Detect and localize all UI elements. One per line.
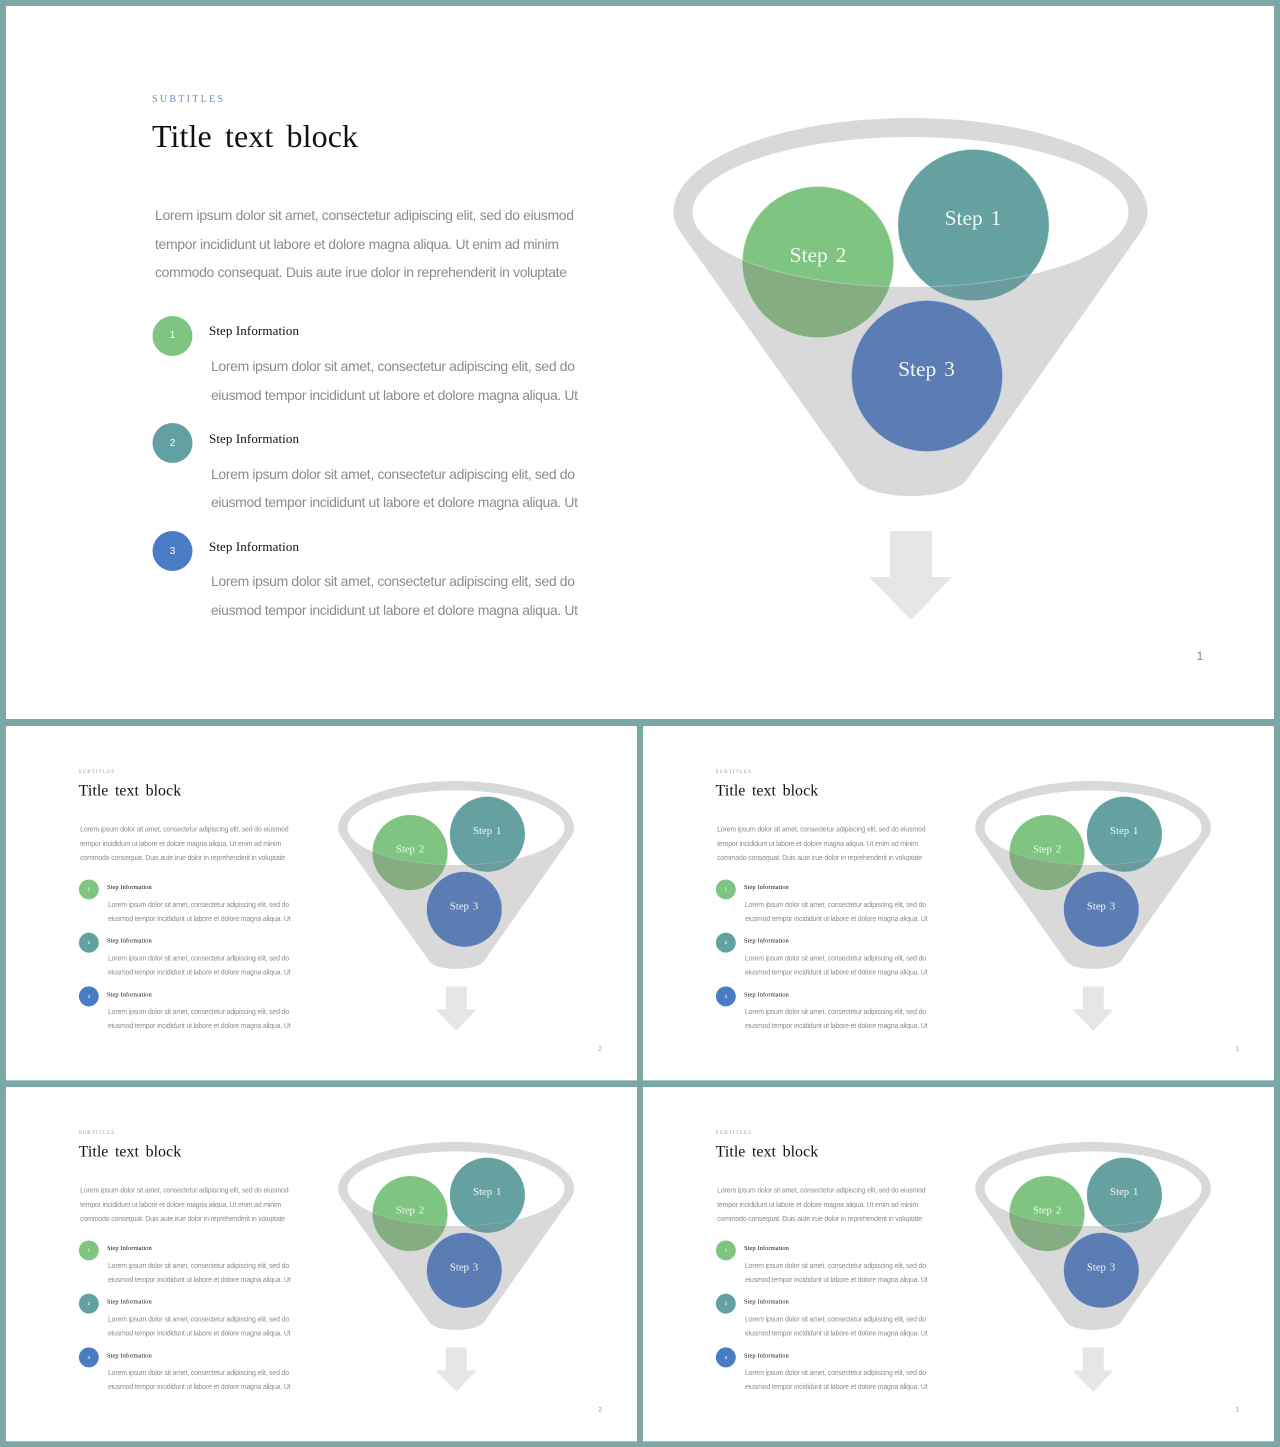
intro text block: commodo consequat. Duis aute irue dolor in reprehenderit in voluptate bbox=[155, 264, 567, 280]
circle: step 3 bbox=[427, 1233, 502, 1308]
title: Title text block bbox=[716, 782, 818, 799]
panel: slide 3 bbox=[643, 726, 1274, 1080]
step item 1: Lorem ipsum dolor sit amet, consectetur adipiscing elit, sed do bbox=[211, 358, 575, 374]
step item 1: Step Information bbox=[209, 323, 300, 338]
intro text block: tempor incididunt ut labore et dolore magna aliqua. Ut enim ad minim bbox=[717, 1202, 918, 1209]
intro text block bbox=[80, 1188, 289, 1223]
circle: step 3: Step 3 bbox=[1087, 1261, 1115, 1273]
intro text block bbox=[717, 827, 926, 862]
step item 3: eiusmod tempor incididunt ut labore et dolore magna aliqua. Ut bbox=[108, 1023, 291, 1030]
step item 2 bbox=[79, 933, 291, 976]
page number: 1 bbox=[1235, 1047, 1239, 1053]
step item 1: eiusmod tempor incididunt ut labore et dolore magna aliqua. Ut bbox=[108, 1277, 291, 1284]
step item 2: Lorem ipsum dolor sit amet, consectetur adipiscing elit, sed do bbox=[108, 956, 289, 963]
step item 3: Step Information bbox=[744, 1352, 790, 1359]
step item 1: Step Information bbox=[744, 1245, 790, 1252]
circle: step 2: Step 2 bbox=[396, 1205, 424, 1217]
circle: step 1 bbox=[1086, 796, 1162, 872]
arrow bbox=[1072, 1347, 1114, 1392]
title: Title text block bbox=[152, 118, 358, 154]
circle: step 1 bbox=[1086, 1157, 1162, 1233]
panel: main slide 1 bbox=[6, 6, 1274, 719]
panel: slide 2 bbox=[6, 726, 637, 1080]
circle: step 3: Step 3 bbox=[450, 900, 478, 912]
circle: step 1 bbox=[898, 149, 1050, 301]
funnel diagram bbox=[338, 1142, 574, 1330]
funnel shape bbox=[674, 118, 1148, 496]
step item 3: 3 bbox=[170, 546, 176, 557]
step item 3: Lorem ipsum dolor sit amet, consectetur adipiscing elit, sed do bbox=[745, 1009, 926, 1016]
circle: step 1 bbox=[450, 796, 526, 872]
intro text block: Lorem ipsum dolor sit amet, consectetur adipiscing elit, sed do eiusmod bbox=[80, 1188, 289, 1195]
step item 3: eiusmod tempor incididunt ut labore et dolore magna aliqua. Ut bbox=[211, 602, 578, 618]
funnel diagram bbox=[674, 118, 1148, 496]
step item 3: 3 bbox=[724, 994, 727, 1000]
step item 3: Step Information bbox=[209, 539, 300, 554]
step item 3: Lorem ipsum dolor sit amet, consectetur adipiscing elit, sed do bbox=[211, 573, 575, 589]
step item 2 bbox=[716, 1294, 928, 1337]
page number: 2 bbox=[598, 1408, 602, 1414]
step item 2: Lorem ipsum dolor sit amet, consectetur adipiscing elit, sed do bbox=[745, 956, 926, 963]
step item 2: 2 bbox=[724, 940, 727, 946]
arrow bbox=[435, 986, 477, 1031]
intro text block: tempor incididunt ut labore et dolore magna aliqua. Ut enim ad minim bbox=[80, 841, 281, 848]
intro text block bbox=[80, 827, 289, 862]
arrow bbox=[435, 1347, 477, 1392]
step item 1: Step Information bbox=[107, 1245, 153, 1252]
circle: step 2: Step 2 bbox=[1033, 844, 1061, 856]
intro text block: tempor incididunt ut labore et dolore magna aliqua. Ut enim ad minim bbox=[717, 841, 918, 848]
step item 3: 3 bbox=[724, 1355, 727, 1361]
circle: step 1 bbox=[450, 1157, 526, 1233]
intro text block: Lorem ipsum dolor sit amet, consectetur adipiscing elit, sed do eiusmod bbox=[717, 827, 926, 834]
subtitle: SUBTITLES bbox=[716, 770, 751, 775]
step item 1 bbox=[716, 1240, 928, 1284]
step item 2 bbox=[152, 423, 578, 510]
circle: step 1: Step 1 bbox=[1110, 825, 1138, 837]
funnel diagram bbox=[975, 781, 1211, 969]
circle: step 3 bbox=[1064, 1233, 1139, 1308]
step item 1: Lorem ipsum dolor sit amet, consectetur adipiscing elit, sed do bbox=[745, 1263, 926, 1270]
circle: step 2: Step 2 bbox=[396, 844, 424, 856]
step item 2: eiusmod tempor incididunt ut labore et dolore magna aliqua. Ut bbox=[745, 969, 928, 976]
step item 2: Step Information bbox=[107, 938, 153, 945]
panel: slide 5 bbox=[643, 1087, 1274, 1441]
step item 3 bbox=[79, 1347, 291, 1391]
step item 1: Lorem ipsum dolor sit amet, consectetur adipiscing elit, sed do bbox=[745, 902, 926, 909]
intro text block: commodo consequat. Duis aute irue dolor in reprehenderit in voluptate bbox=[80, 855, 285, 862]
title: Title text block bbox=[79, 782, 181, 799]
circle: step 2 bbox=[372, 814, 448, 890]
step item 1: eiusmod tempor incididunt ut labore et dolore magna aliqua. Ut bbox=[108, 916, 291, 923]
circle: step 2: Step 2 bbox=[790, 243, 846, 267]
step item 2 bbox=[716, 933, 928, 976]
step item 1: Step Information bbox=[107, 884, 153, 891]
circle: step 2: Step 2 bbox=[1033, 1205, 1061, 1217]
circle: step 3 bbox=[427, 872, 502, 947]
title: Title text block bbox=[716, 1143, 818, 1160]
step item 2: Lorem ipsum dolor sit amet, consectetur adipiscing elit, sed do bbox=[108, 1317, 289, 1324]
step item 2: eiusmod tempor incididunt ut labore et dolore magna aliqua. Ut bbox=[108, 1330, 291, 1337]
step item 3: Lorem ipsum dolor sit amet, consectetur adipiscing elit, sed do bbox=[108, 1370, 289, 1377]
circle: step 3: Step 3 bbox=[1087, 900, 1115, 912]
step item 3 bbox=[716, 1347, 928, 1391]
step item 3: Step Information bbox=[107, 1352, 153, 1359]
step item 2: Lorem ipsum dolor sit amet, consectetur adipiscing elit, sed do bbox=[745, 1317, 926, 1324]
step item 1: 1 bbox=[87, 886, 90, 892]
step item 1 bbox=[79, 1240, 291, 1284]
step item 1: Step Information bbox=[744, 884, 790, 891]
circle: step 1: Step 1 bbox=[1110, 1186, 1138, 1198]
step item 1: Lorem ipsum dolor sit amet, consectetur adipiscing elit, sed do bbox=[108, 1263, 289, 1270]
intro text block: Lorem ipsum dolor sit amet, consectetur adipiscing elit, sed do eiusmod bbox=[80, 827, 289, 834]
step item 2: eiusmod tempor incididunt ut labore et dolore magna aliqua. Ut bbox=[745, 1330, 928, 1337]
circle: step 2 bbox=[372, 1176, 448, 1252]
intro text block: Lorem ipsum dolor sit amet, consectetur adipiscing elit, sed do eiusmod bbox=[155, 207, 574, 223]
circle: step 2 bbox=[1009, 1176, 1085, 1252]
intro text block: Lorem ipsum dolor sit amet, consectetur adipiscing elit, sed do eiusmod bbox=[717, 1188, 926, 1195]
step item 3: 3 bbox=[87, 994, 90, 1000]
panel: slide 4 bbox=[6, 1087, 637, 1441]
step item 1: eiusmod tempor incididunt ut labore et dolore magna aliqua. Ut bbox=[745, 1277, 928, 1284]
intro text block: commodo consequat. Duis aute irue dolor in reprehenderit in voluptate bbox=[80, 1216, 285, 1223]
step item 1 bbox=[79, 879, 291, 923]
step item 1: 1 bbox=[87, 1247, 90, 1253]
funnel diagram bbox=[338, 781, 574, 969]
step item 3: Step Information bbox=[744, 991, 790, 998]
circle: step 3: Step 3 bbox=[898, 357, 955, 381]
intro text block bbox=[155, 207, 574, 280]
circle: step 1: Step 1 bbox=[945, 206, 1001, 230]
step item 3: eiusmod tempor incididunt ut labore et dolore magna aliqua. Ut bbox=[745, 1023, 928, 1030]
intro text block: tempor incididunt ut labore et dolore magna aliqua. Ut enim ad minim bbox=[80, 1202, 281, 1209]
circle: step 2 bbox=[1009, 814, 1085, 890]
step item 3: Lorem ipsum dolor sit amet, consectetur adipiscing elit, sed do bbox=[745, 1370, 926, 1377]
step item 3: eiusmod tempor incididunt ut labore et dolore magna aliqua. Ut bbox=[108, 1384, 291, 1391]
page number: 1 bbox=[1197, 649, 1204, 663]
title: Title text block bbox=[79, 1143, 181, 1160]
step item 2: 2 bbox=[87, 940, 90, 946]
funnel diagram bbox=[975, 1142, 1211, 1330]
circle: step 3 bbox=[1064, 872, 1139, 947]
intro text block bbox=[717, 1188, 926, 1223]
step item 2: Step Information bbox=[744, 938, 790, 945]
subtitle: SUBTITLES bbox=[716, 1131, 751, 1136]
step item 1: 1 bbox=[724, 1247, 727, 1253]
step item 3 bbox=[152, 531, 578, 618]
step item 1 bbox=[152, 316, 578, 403]
circle: step 3 bbox=[852, 300, 1002, 452]
intro text block: commodo consequat. Duis aute irue dolor in reprehenderit in voluptate bbox=[717, 1216, 922, 1223]
step item 1: 1 bbox=[170, 330, 176, 341]
step item 2: eiusmod tempor incididunt ut labore et dolore magna aliqua. Ut bbox=[211, 494, 578, 510]
step item 2 bbox=[79, 1294, 291, 1337]
step item 3 bbox=[79, 986, 291, 1030]
step item 1: eiusmod tempor incididunt ut labore et dolore magna aliqua. Ut bbox=[745, 916, 928, 923]
subtitle: SUBTITLES bbox=[79, 1131, 114, 1136]
intro text block: commodo consequat. Duis aute irue dolor in reprehenderit in voluptate bbox=[717, 855, 922, 862]
subtitle: SUBTITLES bbox=[79, 770, 114, 775]
circle: step 1: Step 1 bbox=[473, 1186, 501, 1198]
step item 3: Lorem ipsum dolor sit amet, consectetur adipiscing elit, sed do bbox=[108, 1009, 289, 1016]
circle: step 1: Step 1 bbox=[473, 825, 501, 837]
circle: step 3: Step 3 bbox=[450, 1261, 478, 1273]
step item 3: eiusmod tempor incididunt ut labore et dolore magna aliqua. Ut bbox=[745, 1384, 928, 1391]
step item 2: 2 bbox=[170, 438, 176, 449]
step item 2: 2 bbox=[87, 1301, 90, 1307]
step item 2: Step Information bbox=[107, 1299, 153, 1306]
step item 3: Step Information bbox=[107, 991, 153, 998]
step item 1: eiusmod tempor incididunt ut labore et dolore magna aliqua. Ut bbox=[211, 387, 578, 403]
arrow bbox=[1072, 986, 1114, 1031]
step item 2: eiusmod tempor incididunt ut labore et dolore magna aliqua. Ut bbox=[108, 969, 291, 976]
step item 2: Step Information bbox=[744, 1299, 790, 1306]
page number: 1 bbox=[1235, 1408, 1239, 1414]
step item 2: Lorem ipsum dolor sit amet, consectetur adipiscing elit, sed do bbox=[211, 466, 575, 482]
subtitle: SUBTITLES bbox=[152, 94, 223, 105]
intro text block: tempor incididunt ut labore et dolore magna aliqua. Ut enim ad minim bbox=[155, 236, 559, 252]
step item 2: Step Information bbox=[209, 431, 300, 446]
circle: step 2 bbox=[742, 186, 894, 338]
step item 1 bbox=[716, 879, 928, 923]
arrow bbox=[869, 531, 952, 620]
step item 1: 1 bbox=[724, 886, 727, 892]
step item 1: Lorem ipsum dolor sit amet, consectetur adipiscing elit, sed do bbox=[108, 902, 289, 909]
step item 2: 2 bbox=[724, 1301, 727, 1307]
step item 3 bbox=[716, 986, 928, 1030]
page number: 2 bbox=[598, 1047, 602, 1053]
step item 3: 3 bbox=[87, 1355, 90, 1361]
